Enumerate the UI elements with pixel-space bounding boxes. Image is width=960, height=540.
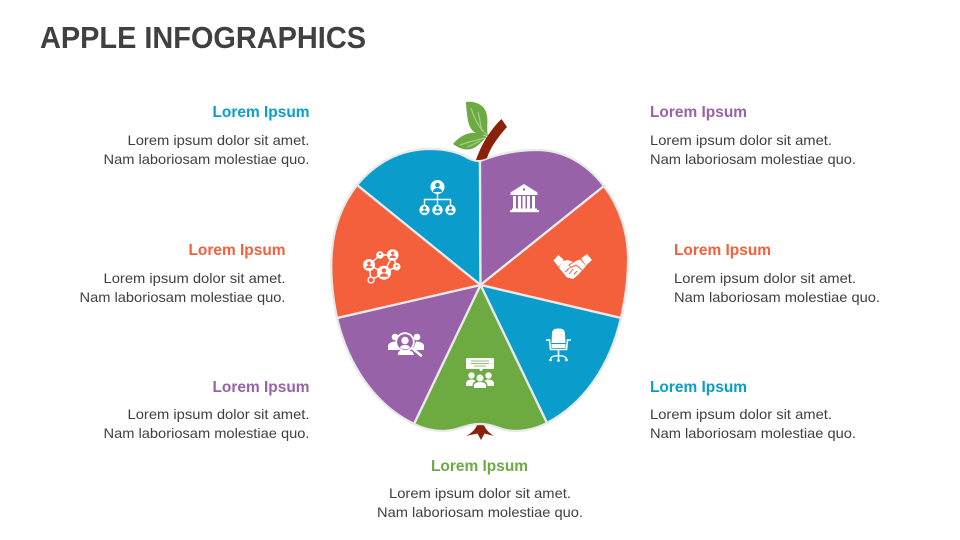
- text block: lower left, purple: Nam laboriosam molestiae quo.: [104, 425, 310, 441]
- text block: top left, blue: Lorem ipsum dolor sit amet.: [128, 132, 310, 148]
- segment: green bottom: [414, 285, 547, 431]
- text block: top left, blue: [104, 104, 310, 167]
- segment: orange left: [331, 185, 480, 318]
- text block: bottom centre, green: Lorem Ipsum: [431, 458, 528, 475]
- icon: apple stem: [476, 119, 507, 160]
- segment: purple lower left: [337, 285, 480, 424]
- icon: network of people: [363, 249, 401, 283]
- text block: top right, purple: Lorem ipsum dolor sit amet.: [650, 132, 832, 148]
- segment: blue top left: [357, 149, 480, 285]
- text block: middle right, orange: Lorem Ipsum: [674, 242, 771, 259]
- text block: top right, purple: Lorem Ipsum: [650, 104, 747, 121]
- text block: top left, blue: Nam laboriosam molestiae quo.: [104, 151, 310, 167]
- text block: lower left, purple: Lorem Ipsum: [212, 379, 310, 396]
- segment: orange right: [480, 186, 628, 318]
- text block: middle left, orange: [80, 242, 286, 305]
- icon: presentation to group: [466, 358, 494, 388]
- text block: lower right, blue: Nam laboriosam molestiae quo.: [650, 425, 856, 441]
- text block: top right, purple: Nam laboriosam molestiae quo.: [650, 151, 856, 167]
- icon: office chair: [546, 328, 571, 362]
- icon: magnifier over people: [388, 333, 424, 356]
- icon: bank building: [510, 184, 539, 212]
- icon: apple base stem: [466, 425, 494, 440]
- text block: top right, purple: [650, 104, 856, 167]
- icon: org chart: [419, 180, 456, 215]
- text block: middle right, orange: [674, 242, 880, 305]
- text block: top left, blue: Lorem Ipsum: [212, 104, 310, 121]
- text block: lower left, purple: [104, 379, 310, 441]
- icon: apple leaves: [453, 102, 488, 150]
- apple body: [331, 149, 628, 431]
- text block: lower right, blue: Lorem Ipsum: [650, 379, 747, 396]
- text block: lower left, purple: Lorem ipsum dolor sit amet.: [128, 406, 310, 422]
- segment: blue lower right: [480, 285, 621, 423]
- text block: middle left, orange: Nam laboriosam molestiae quo.: [80, 289, 286, 305]
- text block: middle right, orange: Nam laboriosam molestiae quo.: [674, 289, 880, 305]
- title: APPLE INFOGRAPHICS: [40, 20, 366, 55]
- text block: middle right, orange: Lorem ipsum dolor sit amet.: [674, 270, 856, 286]
- text block: bottom centre, green: Lorem ipsum dolor sit amet.: [389, 485, 571, 501]
- text block: lower right, blue: Lorem ipsum dolor sit amet.: [650, 406, 832, 422]
- text block: bottom centre, green: [377, 458, 583, 520]
- text block: bottom centre, green: Nam laboriosam molestiae quo.: [377, 504, 583, 520]
- icon: handshake: [554, 254, 592, 279]
- text block: middle left, orange: Lorem ipsum dolor sit amet.: [104, 270, 286, 286]
- text block: middle left, orange: Lorem Ipsum: [188, 242, 286, 259]
- text block: lower right, blue: [650, 379, 856, 441]
- segment: purple top right: [480, 150, 604, 285]
